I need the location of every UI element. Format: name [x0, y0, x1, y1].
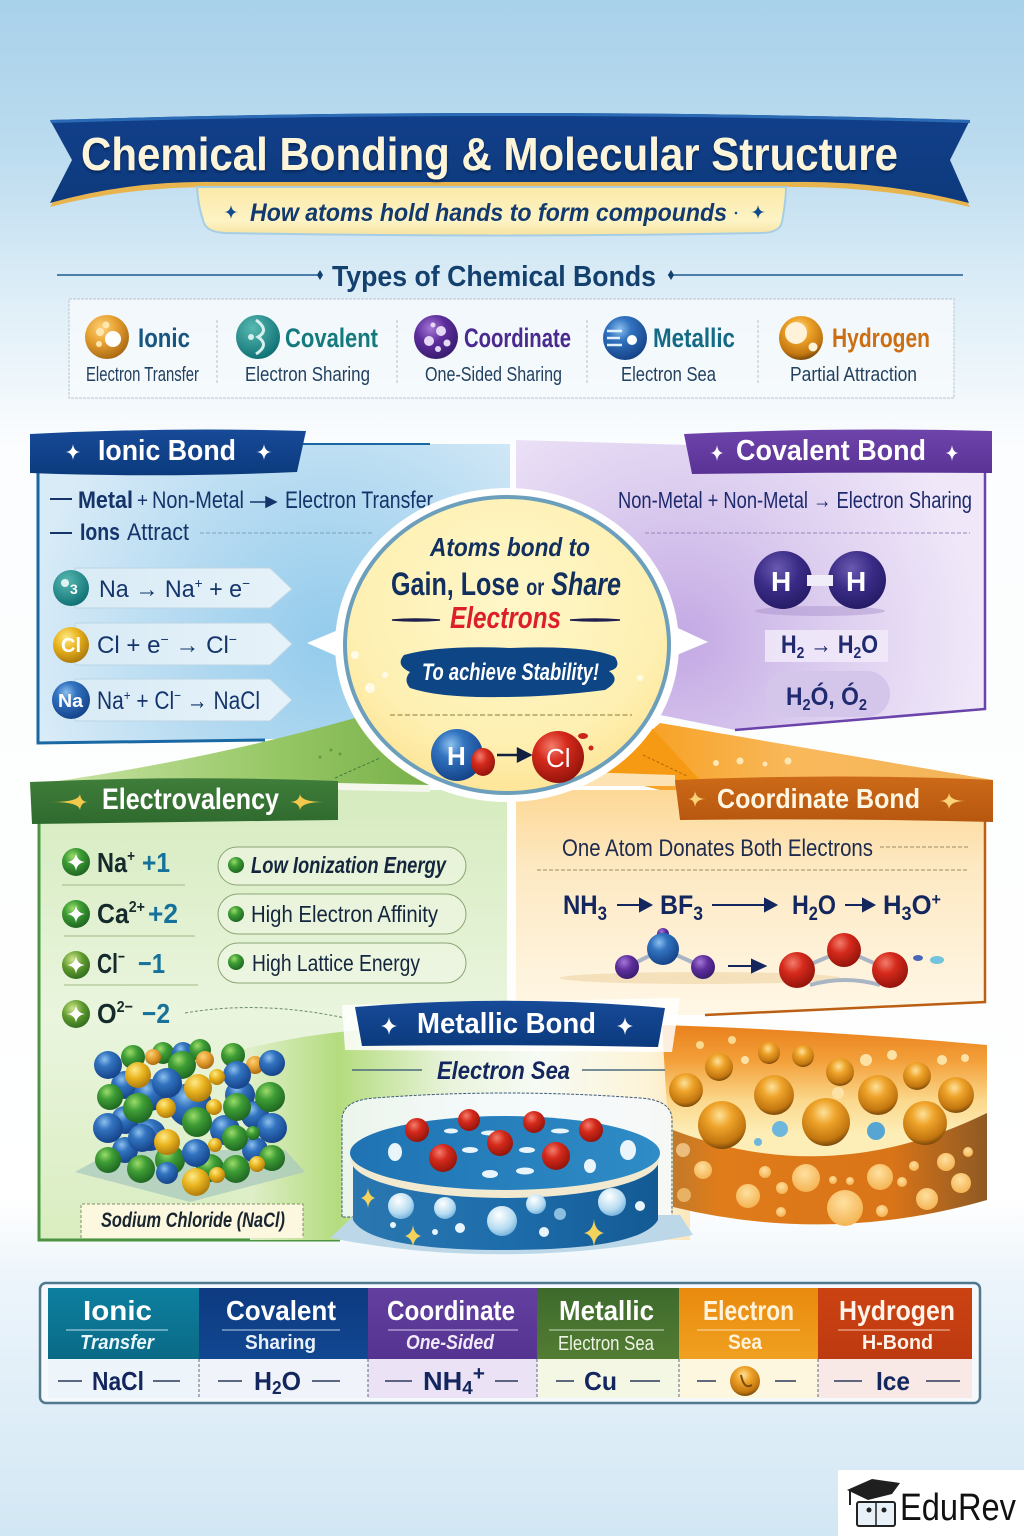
pill: low ionization energy: Low Ionization Energy	[251, 852, 447, 878]
molecules: NH3 and H3O	[560, 928, 944, 988]
examples pill: 2	[859, 697, 867, 714]
column: ionic: Transfer	[80, 1332, 155, 1354]
equation: H2 to H2O	[765, 630, 888, 662]
coordinate equation: +	[932, 890, 941, 909]
icon: graduation cap	[847, 1479, 900, 1526]
column: coordinate	[368, 1288, 537, 1398]
metallic bond header: Metallic Bond	[417, 1008, 596, 1040]
ionic description: +	[137, 490, 148, 512]
ionic description: Metal	[78, 487, 133, 514]
equation: sodium chloride: Na	[97, 687, 129, 715]
equation: sodium chloride: → NaCl	[181, 687, 260, 715]
equation: sodium ionisation: + e	[203, 576, 242, 603]
electrovalency header: Electrovalency	[102, 783, 279, 816]
column: hydrogen: H-Bond	[862, 1332, 933, 1354]
coordinate equation: O	[912, 890, 932, 920]
subtitle text: How atoms hold hands to form compounds	[250, 199, 727, 227]
valency list	[62, 847, 198, 1029]
metallic bond header	[342, 998, 680, 1052]
metallic background blend	[185, 1008, 690, 1240]
type: covalent	[236, 315, 378, 386]
equation: chlorine gain: → Cl	[169, 632, 229, 659]
equation: sodium chloride: −	[174, 687, 181, 703]
coordinate description	[537, 835, 968, 870]
pill: high lattice energy	[218, 943, 466, 983]
valency: Na: Na	[97, 847, 133, 878]
stability pill: To achieve Stability!	[422, 659, 599, 686]
covalent header: Covalent Bond	[736, 435, 926, 467]
column: electron sea: Sea	[728, 1331, 762, 1354]
bubble text: Electrons	[450, 600, 561, 635]
column: covalent: O	[282, 1366, 301, 1396]
equation: sodium chloride	[52, 679, 292, 721]
equation: H2 to H2O: 2	[854, 645, 861, 662]
coordinate equation: 3	[693, 904, 703, 925]
coordinate equation: 3	[902, 904, 912, 925]
equation: chlorine gain: −	[160, 631, 169, 647]
column: metallic	[537, 1288, 679, 1398]
column: coordinate: Coordinate	[387, 1295, 515, 1326]
equation: chlorine gain: −	[229, 631, 237, 647]
column: hydrogen	[818, 1288, 972, 1398]
type: coordinate: One-Sided Sharing	[425, 364, 562, 386]
valency: O: −2	[142, 998, 170, 1029]
valency: Cl	[62, 948, 165, 979]
metallic panel: orange electron sea	[662, 1025, 987, 1226]
bubble text: Gain, Lose or Share	[391, 566, 621, 602]
coordinate description: One Atom Donates Both Electrons	[562, 835, 873, 862]
column: hydrogen: Hydrogen	[839, 1295, 955, 1326]
coordinate equation: H	[883, 890, 902, 920]
panel: types of bonds strip	[69, 299, 954, 398]
coordinate equation: H	[792, 890, 812, 920]
coordinate equation: BF	[660, 890, 696, 920]
coordinate equation	[563, 890, 941, 925]
type: ionic: Ionic	[138, 323, 190, 353]
type: ionic: Electron Transfer	[86, 364, 199, 386]
summary table	[40, 1283, 980, 1403]
type: hydrogen	[779, 316, 930, 386]
section heading: types of chemical bonds: Types of Chemical Bonds	[332, 261, 656, 293]
icon: electron coin	[730, 1366, 760, 1396]
column: electron sea	[679, 1288, 818, 1398]
equation: sodium chloride: Na	[58, 691, 84, 711]
equation: H2 to H2O: → H	[804, 631, 854, 659]
column: metallic: Metallic	[559, 1295, 654, 1326]
equation: chlorine gain	[53, 623, 292, 665]
type: ionic	[85, 315, 199, 386]
panel: coordinate bond	[516, 715, 993, 1015]
ionic description: Non-Metal	[152, 487, 244, 514]
icon: Cl atom: Cl	[546, 743, 571, 773]
column: electron sea: Electron	[703, 1295, 794, 1326]
column: coordinate: +	[473, 1363, 485, 1385]
coordinate equation: 2	[809, 904, 818, 925]
ionic description: Attract	[127, 519, 189, 546]
equation: H2 to H2O: H	[781, 631, 799, 659]
section heading: types of chemical bonds	[57, 261, 963, 293]
examples pill: Ó, Ó	[811, 681, 859, 711]
pill: high lattice energy: High Lattice Energy	[252, 950, 420, 976]
valency: Ca	[62, 898, 178, 929]
coordinate equation: 3	[598, 904, 607, 925]
caption: sodium chloride: Sodium Chloride (NaCl)	[101, 1209, 285, 1232]
equation: H2 to H2O: 2	[797, 645, 804, 662]
type: covalent: Covalent	[285, 323, 378, 353]
molecule: H2: H	[771, 566, 791, 597]
title text: Chemical Bonding & Molecular Structure	[81, 128, 898, 180]
type: coordinate: Coordinate	[464, 323, 571, 353]
equation: sodium ionisation: 3	[70, 581, 78, 597]
icon: H atom	[431, 729, 495, 781]
column: ionic: NaCl	[92, 1366, 144, 1396]
valency: Na	[62, 847, 170, 878]
equation: chlorine gain: Cl	[61, 635, 81, 657]
column: metallic: Cu	[584, 1366, 617, 1396]
column: hydrogen: Ice	[876, 1366, 910, 1396]
pill: high electron affinity	[218, 894, 466, 934]
type: metallic: Electron Sea	[621, 364, 717, 386]
coordinate header: Coordinate Bond	[717, 783, 920, 814]
subtitle ribbon	[197, 187, 786, 236]
valency: Ca: +2	[148, 898, 178, 929]
arrow: H to Cl	[497, 749, 530, 761]
examples pill: 2	[802, 697, 811, 714]
column: coordinate: One-Sided	[406, 1332, 495, 1354]
electron sea subheading: Electron Sea	[437, 1057, 570, 1085]
type: coordinate	[414, 315, 571, 386]
equation: chlorine gain: Cl + e	[97, 632, 160, 659]
column: covalent: 2	[272, 1378, 282, 1398]
molecule: H2: H	[846, 566, 866, 597]
property pills	[218, 847, 466, 983]
stability pill	[401, 647, 617, 697]
title banner	[50, 113, 970, 207]
column: coordinate: NH	[423, 1366, 461, 1396]
valency: O: 2−	[117, 999, 133, 1016]
valency: Cl: −	[118, 949, 125, 966]
column: covalent: Covalent	[226, 1295, 336, 1326]
equation: H2 to H2O: O	[861, 631, 878, 659]
valency: Na: +1	[142, 847, 170, 878]
type: covalent: Electron Sharing	[245, 364, 370, 386]
valency: Ca: 2+	[129, 899, 145, 916]
type: hydrogen: Partial Attraction	[790, 364, 917, 386]
valency: Na: +	[127, 848, 135, 865]
pill: low ionization energy	[218, 847, 466, 885]
column: covalent: H	[254, 1366, 273, 1396]
column: covalent: Sharing	[245, 1332, 316, 1354]
icon: H atom: H	[447, 741, 466, 771]
examples pill: H	[786, 683, 804, 711]
bubble text: Atoms bond to	[429, 532, 590, 562]
electron sea disc	[330, 1093, 693, 1254]
panel: electrovalency	[30, 718, 507, 1240]
type: metallic	[603, 316, 735, 386]
bubble text	[391, 532, 621, 635]
panel: covalent bond	[516, 430, 992, 730]
column: metallic: Electron Sea	[558, 1333, 655, 1355]
ionic description: Electron Transfer	[285, 487, 433, 514]
column: ionic: Ionic	[83, 1295, 152, 1326]
valency: O: O	[97, 998, 119, 1029]
covalent header	[684, 430, 992, 474]
logo: EduRev	[838, 1470, 1024, 1536]
ionic header	[30, 430, 306, 475]
equation: sodium chloride: + Cl	[131, 687, 174, 715]
ionic description: Ions	[80, 519, 120, 546]
equation: sodium ionisation	[53, 568, 292, 608]
valency: Cl: Cl	[97, 948, 125, 979]
ionic header: Ionic Bond	[98, 435, 236, 467]
pill: high electron affinity: High Electron Affinity	[251, 901, 438, 927]
coordinate header	[675, 776, 993, 822]
sodium chloride crystal	[75, 1039, 305, 1202]
valency: O	[62, 998, 170, 1029]
coordinate equation: O	[818, 890, 836, 920]
type: metallic: Metallic	[653, 323, 735, 353]
column: coordinate: 4	[462, 1378, 473, 1398]
caption: sodium chloride	[81, 1204, 303, 1238]
equation: sodium ionisation: Na → Na	[99, 576, 198, 603]
type: hydrogen: Hydrogen	[832, 323, 930, 353]
coordinate equation: NH	[563, 890, 602, 920]
equation: sodium chloride: +	[124, 687, 131, 703]
electrovalency header	[30, 778, 338, 824]
column: covalent	[199, 1288, 368, 1398]
icon: Cl atom	[532, 731, 594, 783]
centre bubble: why atoms bond	[307, 488, 708, 802]
panel: ionic bond	[30, 430, 510, 743]
valency: Cl: −1	[138, 948, 165, 979]
column: ionic	[48, 1288, 199, 1398]
equation: sodium ionisation: +	[195, 575, 203, 591]
examples pill	[765, 671, 890, 717]
valency: Ca: Ca	[97, 898, 133, 929]
equation: sodium ionisation: −	[242, 575, 250, 591]
ionic description	[50, 487, 433, 546]
molecule: H2	[754, 551, 886, 616]
